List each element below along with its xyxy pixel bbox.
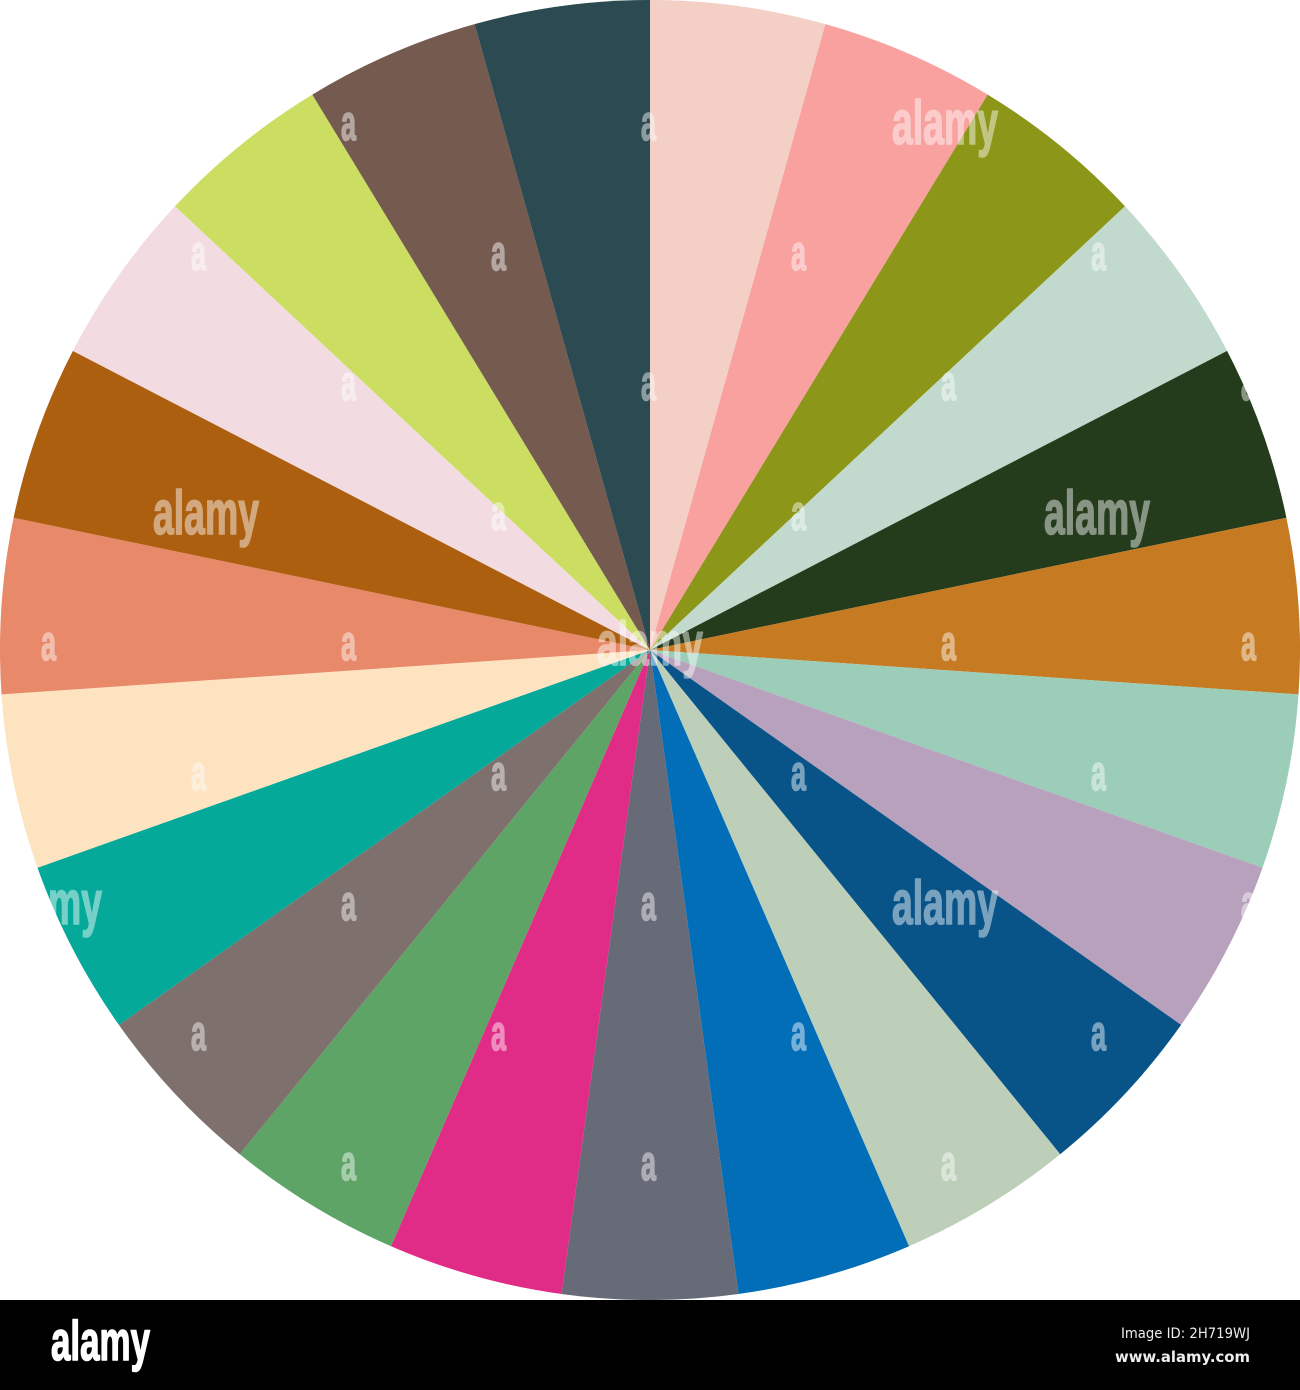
watermark: small repeated a marks: a xyxy=(341,95,357,151)
watermark: large alamy wordmarks xyxy=(0,89,1150,938)
wedge 16: teal xyxy=(38,650,650,1025)
watermark: small repeated a marks: a xyxy=(491,1005,507,1061)
watermark: small repeated a marks: a xyxy=(641,1135,657,1191)
wedge 10: sage xyxy=(650,650,1060,1246)
watermark: small repeated a marks: a xyxy=(341,355,357,411)
watermark: large alamy wordmarks: alamy xyxy=(597,610,703,679)
footer text: website: www.alamy.com xyxy=(1115,1348,1250,1366)
watermark: small repeated a marks: a xyxy=(941,615,957,671)
wedge 13: magenta xyxy=(391,650,650,1294)
watermark: small repeated a marks: a xyxy=(191,1005,207,1061)
watermark: small repeated a marks: a xyxy=(1091,745,1107,801)
wedge 9: navy blue xyxy=(650,650,1181,1154)
wedge 15: taupe xyxy=(119,650,650,1154)
wedge 22: brown xyxy=(312,24,650,650)
watermark: small repeated a marks: a xyxy=(1241,615,1257,671)
watermark: small repeated a marks: a xyxy=(791,1005,807,1061)
wedge 18: coral xyxy=(0,518,650,694)
wedge 23: dark teal xyxy=(475,0,650,650)
wedge 1: pale pink xyxy=(650,0,825,650)
watermark: small repeated a marks: a xyxy=(491,745,507,801)
watermark: small repeated a marks: a xyxy=(941,1135,957,1191)
footer text: image id: Image ID: 2H719WJ xyxy=(1121,1326,1250,1342)
watermark: large alamy wordmarks: alamy xyxy=(892,89,998,158)
watermark: small repeated a marks: a xyxy=(191,745,207,801)
watermark: small repeated a marks: a xyxy=(341,875,357,931)
watermark: small repeated a marks: a xyxy=(1091,1005,1107,1061)
watermark: small repeated a marks: a xyxy=(791,225,807,281)
watermark: small repeated a marks: a xyxy=(791,485,807,541)
watermark: small repeated a marks xyxy=(41,95,1257,1191)
footer bar: stock image credit strip xyxy=(0,1300,1300,1390)
wedge 14: green xyxy=(240,650,650,1246)
wedge 3: olive xyxy=(650,95,1125,650)
watermark: small repeated a marks: a xyxy=(1091,225,1107,281)
wedge 2: salmon pink xyxy=(650,24,988,650)
watermark: small repeated a marks: a xyxy=(1241,875,1257,931)
wedge 6: ochre xyxy=(650,518,1300,694)
watermark: large alamy wordmarks: alamy xyxy=(153,479,259,548)
watermark: large alamy wordmarks: alamy xyxy=(892,869,998,938)
wedge 4: pale green xyxy=(650,206,1227,650)
wedge 20: light pink xyxy=(73,206,650,650)
watermark: small repeated a marks: a xyxy=(641,875,657,931)
wedge 17: cream xyxy=(2,650,650,868)
wedge 12: slate grey xyxy=(562,650,738,1300)
watermark: small repeated a marks: a xyxy=(791,745,807,801)
watermark: small repeated a marks: a xyxy=(491,485,507,541)
watermark: large alamy wordmarks: alamy xyxy=(1044,479,1150,548)
watermark: small repeated a marks: a xyxy=(941,355,957,411)
watermark: small repeated a marks: a xyxy=(191,225,207,281)
watermark: small repeated a marks: a xyxy=(341,1135,357,1191)
watermark: small repeated a marks: a xyxy=(341,615,357,671)
wedge 11: blue xyxy=(650,650,909,1294)
watermark: small repeated a marks: a xyxy=(641,355,657,411)
watermark: small repeated a marks: a xyxy=(491,225,507,281)
wedge 5: dark green xyxy=(650,351,1286,650)
watermark: large alamy wordmarks: alamy xyxy=(0,869,102,938)
wedge 7: mint xyxy=(650,650,1298,868)
wedge 21: lime xyxy=(175,95,650,650)
wedge 8: mauve xyxy=(650,650,1262,1025)
footer logo: alamy: alamy xyxy=(51,1309,150,1372)
watermark: small repeated a marks: a xyxy=(41,615,57,671)
wedge 19: brown orange xyxy=(14,351,650,650)
watermark: small repeated a marks: a xyxy=(641,95,657,151)
watermark: small repeated a marks: a xyxy=(1241,355,1257,411)
